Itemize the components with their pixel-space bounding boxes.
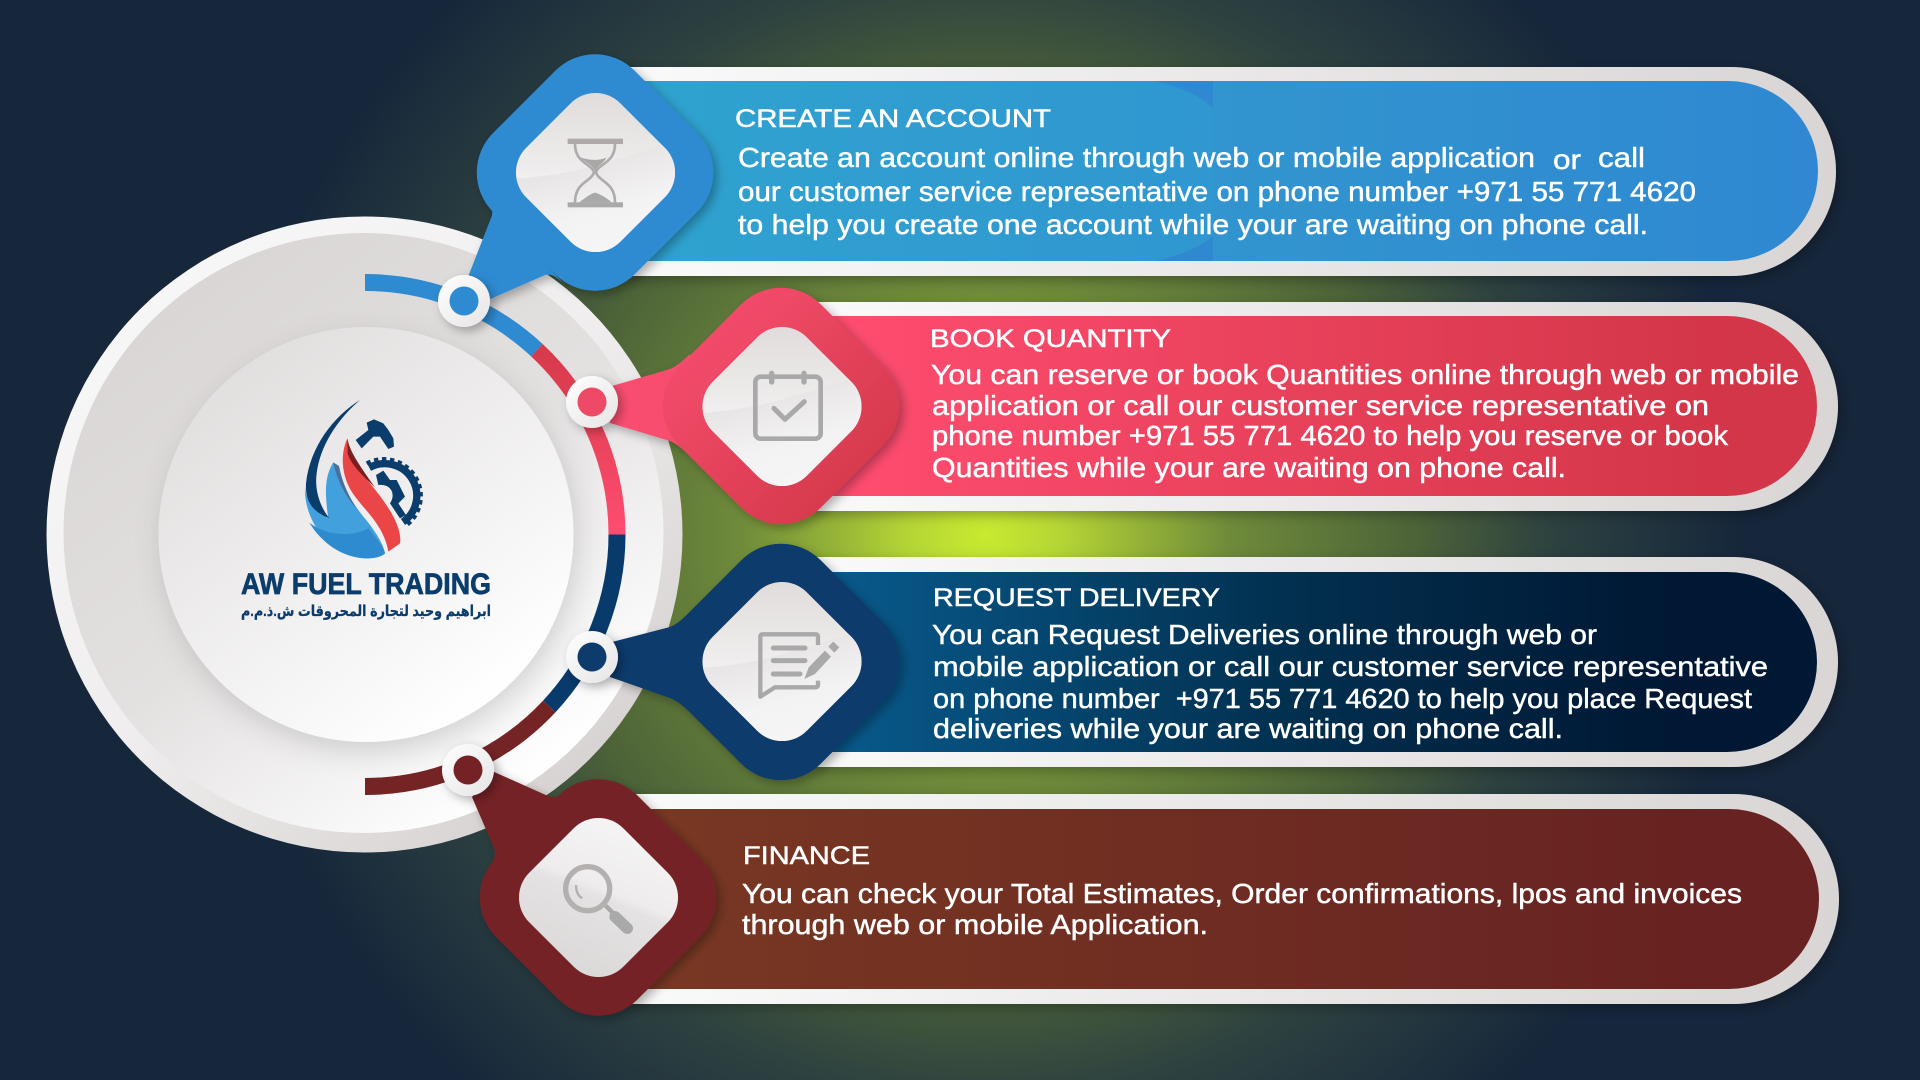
- logo name: AW FUEL TRADING: [241, 568, 491, 601]
- text block: on phone number +971 55 771 4620 to help you place Request: [933, 683, 1752, 714]
- callout: hourglass diamond: [468, 54, 722, 308]
- callout: calendar diamond: [610, 288, 909, 532]
- callout: magnifier diamond: [472, 772, 724, 1020]
- heading: CREATE AN ACCOUNT: [735, 105, 1051, 133]
- heading: REQUEST DELIVERY: [933, 584, 1220, 612]
- icon: document and pencil: [760, 634, 839, 697]
- text block: [932, 619, 1768, 744]
- text block: through web or mobile Application.: [742, 909, 1208, 940]
- panel: book quantity: [811, 302, 1838, 511]
- text block: You can reserve or book Quantities online through web or mobile: [931, 359, 1799, 390]
- text block: You can Request Deliveries online through web or: [932, 619, 1597, 650]
- progress ring arcs: [365, 282, 617, 786]
- panel: request delivery: [811, 557, 1838, 767]
- icon: calendar check: [755, 373, 821, 439]
- text block: our customer service representative on phone number +971 55 771 4620: [738, 176, 1696, 207]
- central circle: [46, 216, 682, 852]
- text block: mobile application or call our customer service representative: [933, 651, 1768, 682]
- text block: Quantities while your are waiting on phone call.: [932, 452, 1566, 483]
- text block: You can check your Total Estimates, Order confirmations, lpos and invoices: [742, 878, 1742, 909]
- heading: BOOK QUANTITY: [930, 325, 1171, 353]
- logo mark: [305, 400, 421, 558]
- text block: application or call our customer service representative on: [932, 390, 1709, 421]
- text block: or: [1553, 144, 1581, 175]
- node: red: [566, 376, 618, 428]
- panel: create an account: [625, 67, 1836, 276]
- text block: [931, 359, 1799, 483]
- node: navy: [566, 631, 618, 683]
- logo: AW Fuel Trading: [241, 400, 491, 620]
- panel: finance: [628, 794, 1839, 1004]
- icon: hourglass: [568, 139, 623, 207]
- text block: call: [1598, 142, 1645, 173]
- node: maroon: [442, 744, 494, 796]
- heading: FINANCE: [743, 842, 870, 870]
- text block: to help you create one account while your are waiting on phone call.: [738, 209, 1648, 240]
- text block: [738, 142, 1696, 240]
- node: blue: [438, 275, 490, 327]
- callout: document diamond: [610, 544, 907, 788]
- text block: deliveries while your are waiting on phone call.: [933, 713, 1563, 744]
- text block: phone number +971 55 771 4620 to help you reserve or book: [932, 420, 1729, 451]
- icon: magnifying glass: [566, 867, 627, 928]
- logo arabic name: ابراهيم وحيد لتجارة المحروقات ش.ذ.م.م: [241, 602, 491, 620]
- text block: Create an account online through web or mobile application: [738, 142, 1535, 173]
- text block: [742, 878, 1742, 940]
